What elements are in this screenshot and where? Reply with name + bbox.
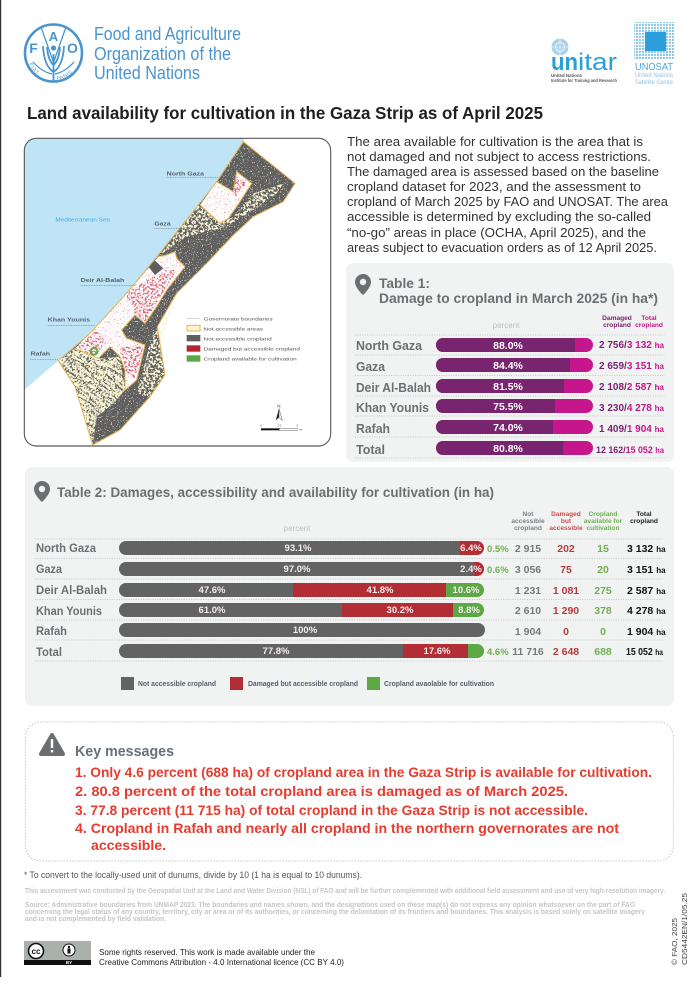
copyright and document code: CD5442EN/1/05.25 <box>680 893 689 965</box>
table 2 column headers: cropland <box>514 525 542 532</box>
table 2 row: North Gaza: 2 915 <box>515 543 541 555</box>
table 2 row: North Gaza: 93.1% <box>285 543 312 554</box>
intro text block: areas subject to evacuation orders as of 12 April 2025. <box>347 240 657 255</box>
logo: UNOSAT <box>634 22 675 86</box>
icon: warning triangle <box>41 735 63 754</box>
table 2 legend: Not accessible cropland <box>138 681 216 688</box>
table 1 row: North Gaza <box>356 338 665 353</box>
table 1 row: Khan Younis: 3 230/4 278 ha <box>599 403 665 414</box>
page edge line <box>0 0 1 977</box>
table 2 row: Deir Al-Balah <box>36 583 666 597</box>
icon: CC BY licence badge: BY <box>66 960 72 965</box>
table 1 column headers: cropland <box>635 322 663 329</box>
table 2 row: Total: 17.6% <box>424 646 451 657</box>
table 2 column headers: accessible <box>549 525 583 532</box>
table 1 row: Total: 12 162/15 052 ha <box>596 445 665 456</box>
key messages list <box>75 765 652 853</box>
intro text block: The area available for cultivation is the area that is <box>347 134 643 149</box>
table 2 row: Deir Al-Balah: 2 587 ha <box>627 585 666 597</box>
table 1 row: Gaza: Gaza <box>356 359 386 374</box>
icon: location pin <box>355 274 371 295</box>
logo: UNOSAT: Satellite Centre <box>635 79 673 86</box>
table 1 row: North Gaza: 88.0% <box>493 340 524 352</box>
source and disclaimer: and is not complemented by field validation. <box>25 916 166 923</box>
key messages list: 3. 77.8 percent (11 715 ha) of total cropland in the Gaza Strip is not accessible. <box>75 803 588 818</box>
logo: FAO: FIAT <box>29 62 40 74</box>
table 2 legend <box>121 677 494 690</box>
governorate labels: Gaza <box>154 222 171 228</box>
table 2 column headers: available for <box>584 518 623 525</box>
logo: UNITAR: United Nations <box>551 73 583 78</box>
table 1 column headers: Damaged <box>602 315 632 322</box>
key messages list: accessible. <box>91 838 166 853</box>
logo: FAO: A <box>49 29 59 44</box>
sea label: Mediterranean Sea <box>55 217 110 223</box>
table 2 row: North Gaza: 15 <box>597 543 609 555</box>
table 2 column headers: but <box>561 518 572 525</box>
table 2 row: Khan Younis: 378 <box>594 605 612 617</box>
key messages list: 4. Cropland in Rafah and nearly all cropland in the northern governorates are not <box>75 821 619 836</box>
panel: key messages <box>26 722 674 861</box>
table 1 row: Total <box>356 441 665 457</box>
table 2 row: Gaza <box>36 562 666 576</box>
table 1 row: Total: Total <box>356 442 385 457</box>
logo: UNOSAT: United Nations <box>635 72 673 79</box>
table 2 row: North Gaza: North Gaza <box>36 543 97 555</box>
logo: FAO: O <box>67 40 78 56</box>
governorate labels: Rafah <box>31 352 50 358</box>
map legend: Not accessible cropland <box>204 337 272 343</box>
organisation name: United Nations <box>94 62 200 83</box>
source and disclaimer <box>25 902 645 923</box>
source and disclaimer: Source: Administrative boundaries from UNMAP 2023. The boundaries and names shown, and the designations used on these map(s) do not express any opinion whatsoever on the part of FAO <box>25 902 636 909</box>
logo: FAO <box>24 23 84 83</box>
table 2 column headers: Not <box>522 511 534 518</box>
table 2 column headers: cultivation <box>587 525 619 532</box>
logo: UNITAR: itar <box>578 49 617 76</box>
table 2 row: Khan Younis: 1 290 <box>553 605 579 617</box>
key messages heading: Key messages <box>75 744 174 760</box>
panel: table 2 <box>25 467 674 706</box>
table 2 row: Gaza: 0.6% <box>487 565 509 576</box>
table 2 row: Rafah: 1 904 <box>515 626 541 638</box>
table 2 column headers: Cropland <box>589 511 617 518</box>
title: Land availability for cultivation in the Gaza Strip as of April 2025 <box>27 103 543 123</box>
table 1 heading: Damage to cropland in March 2025 (in ha*) <box>379 291 658 306</box>
intro text block: cropland dataset for 2023, and the assessment to <box>347 179 641 194</box>
table 1 row: Rafah: 74.0% <box>493 422 524 434</box>
table 2 row: North Gaza: 6.4% <box>460 543 482 554</box>
table 1 row: Khan Younis <box>356 399 665 415</box>
table 1 column headers: percent <box>493 321 520 330</box>
table 2 row: Total: 2 648 <box>553 646 579 658</box>
table 2 row: North Gaza: 3 132 ha <box>627 543 666 555</box>
map legend: Cropland available for cultivation <box>204 357 297 363</box>
table 2 row: North Gaza: 0.5% <box>487 544 509 555</box>
intro text block: cropland of March 2025 by FAO and UNOSAT. The area <box>347 194 669 209</box>
Gaza Strip land cover <box>53 140 300 448</box>
table 1 column headers <box>493 315 663 330</box>
table 2 row: Khan Younis: 61.0% <box>199 605 226 616</box>
table 2 row: Rafah: 0 <box>600 626 606 638</box>
organisation name <box>94 23 241 83</box>
table 1 row: Deir Al-Balah: 2 108/2 587 ha <box>599 382 665 393</box>
north arrow and scale bar: 0 <box>260 424 262 428</box>
intro text block: accessible is determined by excluding the so-called <box>347 209 651 224</box>
table 2 row: Gaza: 75 <box>560 564 572 576</box>
table 2 row: Deir Al-Balah: 1 231 <box>515 585 541 597</box>
table 2 column headers: percent <box>284 524 311 533</box>
table 1 row: Gaza: 2 659/3 151 ha <box>599 361 665 372</box>
table 2 row: Rafah: 1 904 ha <box>627 626 666 638</box>
table 1 row: Rafah <box>356 420 665 436</box>
governorate labels: Khan Younis <box>48 318 90 324</box>
source and disclaimer: concerning the legal status of any country, territory, city or area or of its authorities, or concerning the delimitation of its frontiers and boundaries. This analysis is based solely on satellite imagery <box>25 909 645 916</box>
licence text: Some rights reserved. This work is made available under the <box>99 947 315 957</box>
map legend: Governorate boundaries <box>204 316 273 322</box>
table 2 row: Khan Younis: 8.8% <box>458 605 480 616</box>
table 1 column headers: Total <box>641 315 657 322</box>
table 2 row: Gaza: 3 056 <box>515 564 541 576</box>
intro text block: The damaged area is assessed based on the baseline <box>347 164 659 179</box>
table 2 row: Deir Al-Balah: Deir Al-Balah <box>36 585 107 597</box>
table 1 heading: Table 1: <box>379 276 430 291</box>
organisation name: Organization of the <box>94 43 231 64</box>
organisation name: Food and Agriculture <box>94 23 241 44</box>
table 2 row: Total: Total <box>36 647 62 659</box>
table 2 heading: Table 2: Damages, accessibility and availability for cultivation (in ha) <box>57 485 494 500</box>
table 2 row: Gaza: 3 151 ha <box>627 564 666 576</box>
logo: FAO: F <box>29 40 38 56</box>
table 1 row: North Gaza: 2 756/3 132 ha <box>599 340 665 351</box>
table 2 row: Gaza: Gaza <box>36 564 63 576</box>
north arrow and scale bar: 5 <box>297 424 299 428</box>
table 2 row: Khan Younis <box>36 603 666 618</box>
table 2 column headers: accessible <box>511 518 545 525</box>
map legend <box>187 316 300 363</box>
table 2 column headers: cropland <box>630 518 658 525</box>
north arrow and scale bar: km <box>299 429 302 431</box>
table 2 row: Deir Al-Balah: 1 081 <box>553 585 579 597</box>
table 1 row: Khan Younis: 75.5% <box>493 401 524 413</box>
intro text block: “no-go” areas in place (OCHA, April 2025), and the <box>347 225 646 240</box>
icon: CC BY licence badge: cc <box>32 947 41 956</box>
licence text: Creative Commons Attribution - 4.0 International licence (CC BY 4.0) <box>99 957 344 967</box>
north arrow and scale bar <box>260 403 302 431</box>
table 2 row: Total: 4.6% <box>487 647 509 658</box>
panel: table 1 <box>346 263 674 462</box>
table 2 legend: Cropland avaolable for cultivation <box>384 681 494 688</box>
table 2 row: Gaza: 97.0% <box>284 564 311 575</box>
table 2 column headers: Damaged <box>551 511 581 518</box>
intro text block: not damaged and not subject to access restrictions. <box>347 149 651 164</box>
table 2 row: Deir Al-Balah: 41.8% <box>367 585 394 596</box>
table 2 row: North Gaza <box>36 541 666 555</box>
north arrow and scale bar: 2.5 <box>277 424 282 428</box>
logo: UNITAR: Institute for Training and Research <box>551 78 617 83</box>
footnote: dunum conversion: * To convert to the locally-used unit of dunums, divide by 10 (1 ha is equal to 10 dunums). <box>24 870 362 880</box>
table 1 row: Rafah: Rafah <box>356 421 390 436</box>
table 1 heading <box>379 276 658 306</box>
key messages list: 2. 80.8 percent of the total cropland area is damaged as of March 2025. <box>75 784 568 799</box>
governorate labels: Deir Al-Balah <box>81 278 124 284</box>
table 1 row: Rafah: 1 409/1 904 ha <box>599 424 665 435</box>
icon: CC BY licence badge <box>24 941 91 965</box>
table 1 row: Deir Al-Balah: Deir Al-Balah <box>356 380 431 395</box>
governorate labels <box>30 172 218 359</box>
table 2 column headers <box>284 511 658 533</box>
copyright and document code <box>670 893 689 965</box>
table 2 row: Total: 77.8% <box>263 646 290 657</box>
table 2 row: Khan Younis: Khan Younis <box>36 606 102 618</box>
table 2 row: Deir Al-Balah: 47.6% <box>199 585 226 596</box>
table 2 row: North Gaza: 202 <box>557 543 575 555</box>
logo: UNOSAT: UNOSAT <box>635 61 674 73</box>
map panel <box>20 130 331 448</box>
map legend: Not accessible areas <box>204 326 264 332</box>
table 2 row: Khan Younis: 2 610 <box>515 605 541 617</box>
table 1 row: Khan Younis: Khan Younis <box>356 400 429 415</box>
table 2 row: Total <box>36 644 663 659</box>
table 2 row: Khan Younis: 4 278 ha <box>627 605 666 617</box>
logo: UNITAR <box>551 38 617 83</box>
table 1 row: Deir Al-Balah <box>356 379 665 395</box>
governorate labels: North Gaza <box>167 172 204 178</box>
logo: FAO: PANIS <box>56 70 72 80</box>
table 2 row: Total: 15 052 ha <box>626 646 663 658</box>
table 2 row: Gaza: 20 <box>597 564 609 576</box>
table 2 row: Total: 688 <box>594 646 612 658</box>
table 2 row: Deir Al-Balah: 10.6% <box>453 585 480 596</box>
table 2 row: Khan Younis: 30.2% <box>387 605 414 616</box>
key messages list: 1. Only 4.6 percent (688 ha) of cropland area in the Gaza Strip is available for cultivation. <box>75 765 652 780</box>
intro text block <box>347 134 669 255</box>
table 2 row: Rafah: 100% <box>293 625 318 636</box>
table 1 row: North Gaza: North Gaza <box>356 338 423 353</box>
table 1 row: Gaza <box>356 358 665 374</box>
logo: UNITAR: un <box>551 49 578 76</box>
table 1 row: Total: 80.8% <box>493 443 524 455</box>
licence text <box>99 947 344 967</box>
table 2 row: Rafah: Rafah <box>36 626 67 638</box>
table 1 row: Deir Al-Balah: 81.5% <box>493 381 524 393</box>
sea <box>20 130 247 389</box>
table 2 row: Deir Al-Balah: 275 <box>594 585 612 597</box>
table 1 row: Gaza: 84.4% <box>493 360 524 372</box>
table 2 row: Gaza: 2.4% <box>460 564 482 575</box>
table 2 legend: Damaged but accessible cropland <box>248 681 358 688</box>
icon: location pin <box>34 481 50 502</box>
table 1 column headers: cropland <box>603 322 631 329</box>
map legend: Damaged but accessible cropland <box>204 347 300 353</box>
table 2 column headers: Total <box>636 511 652 518</box>
copyright and document code: © FAO, 2025 <box>670 918 679 965</box>
north arrow and scale bar: N <box>277 403 281 408</box>
map frame <box>24 138 331 446</box>
table 2 row: Rafah: 0 <box>563 626 569 638</box>
table 2 row: Total: 11 716 <box>512 646 544 658</box>
table 2 row: Rafah <box>36 623 666 638</box>
